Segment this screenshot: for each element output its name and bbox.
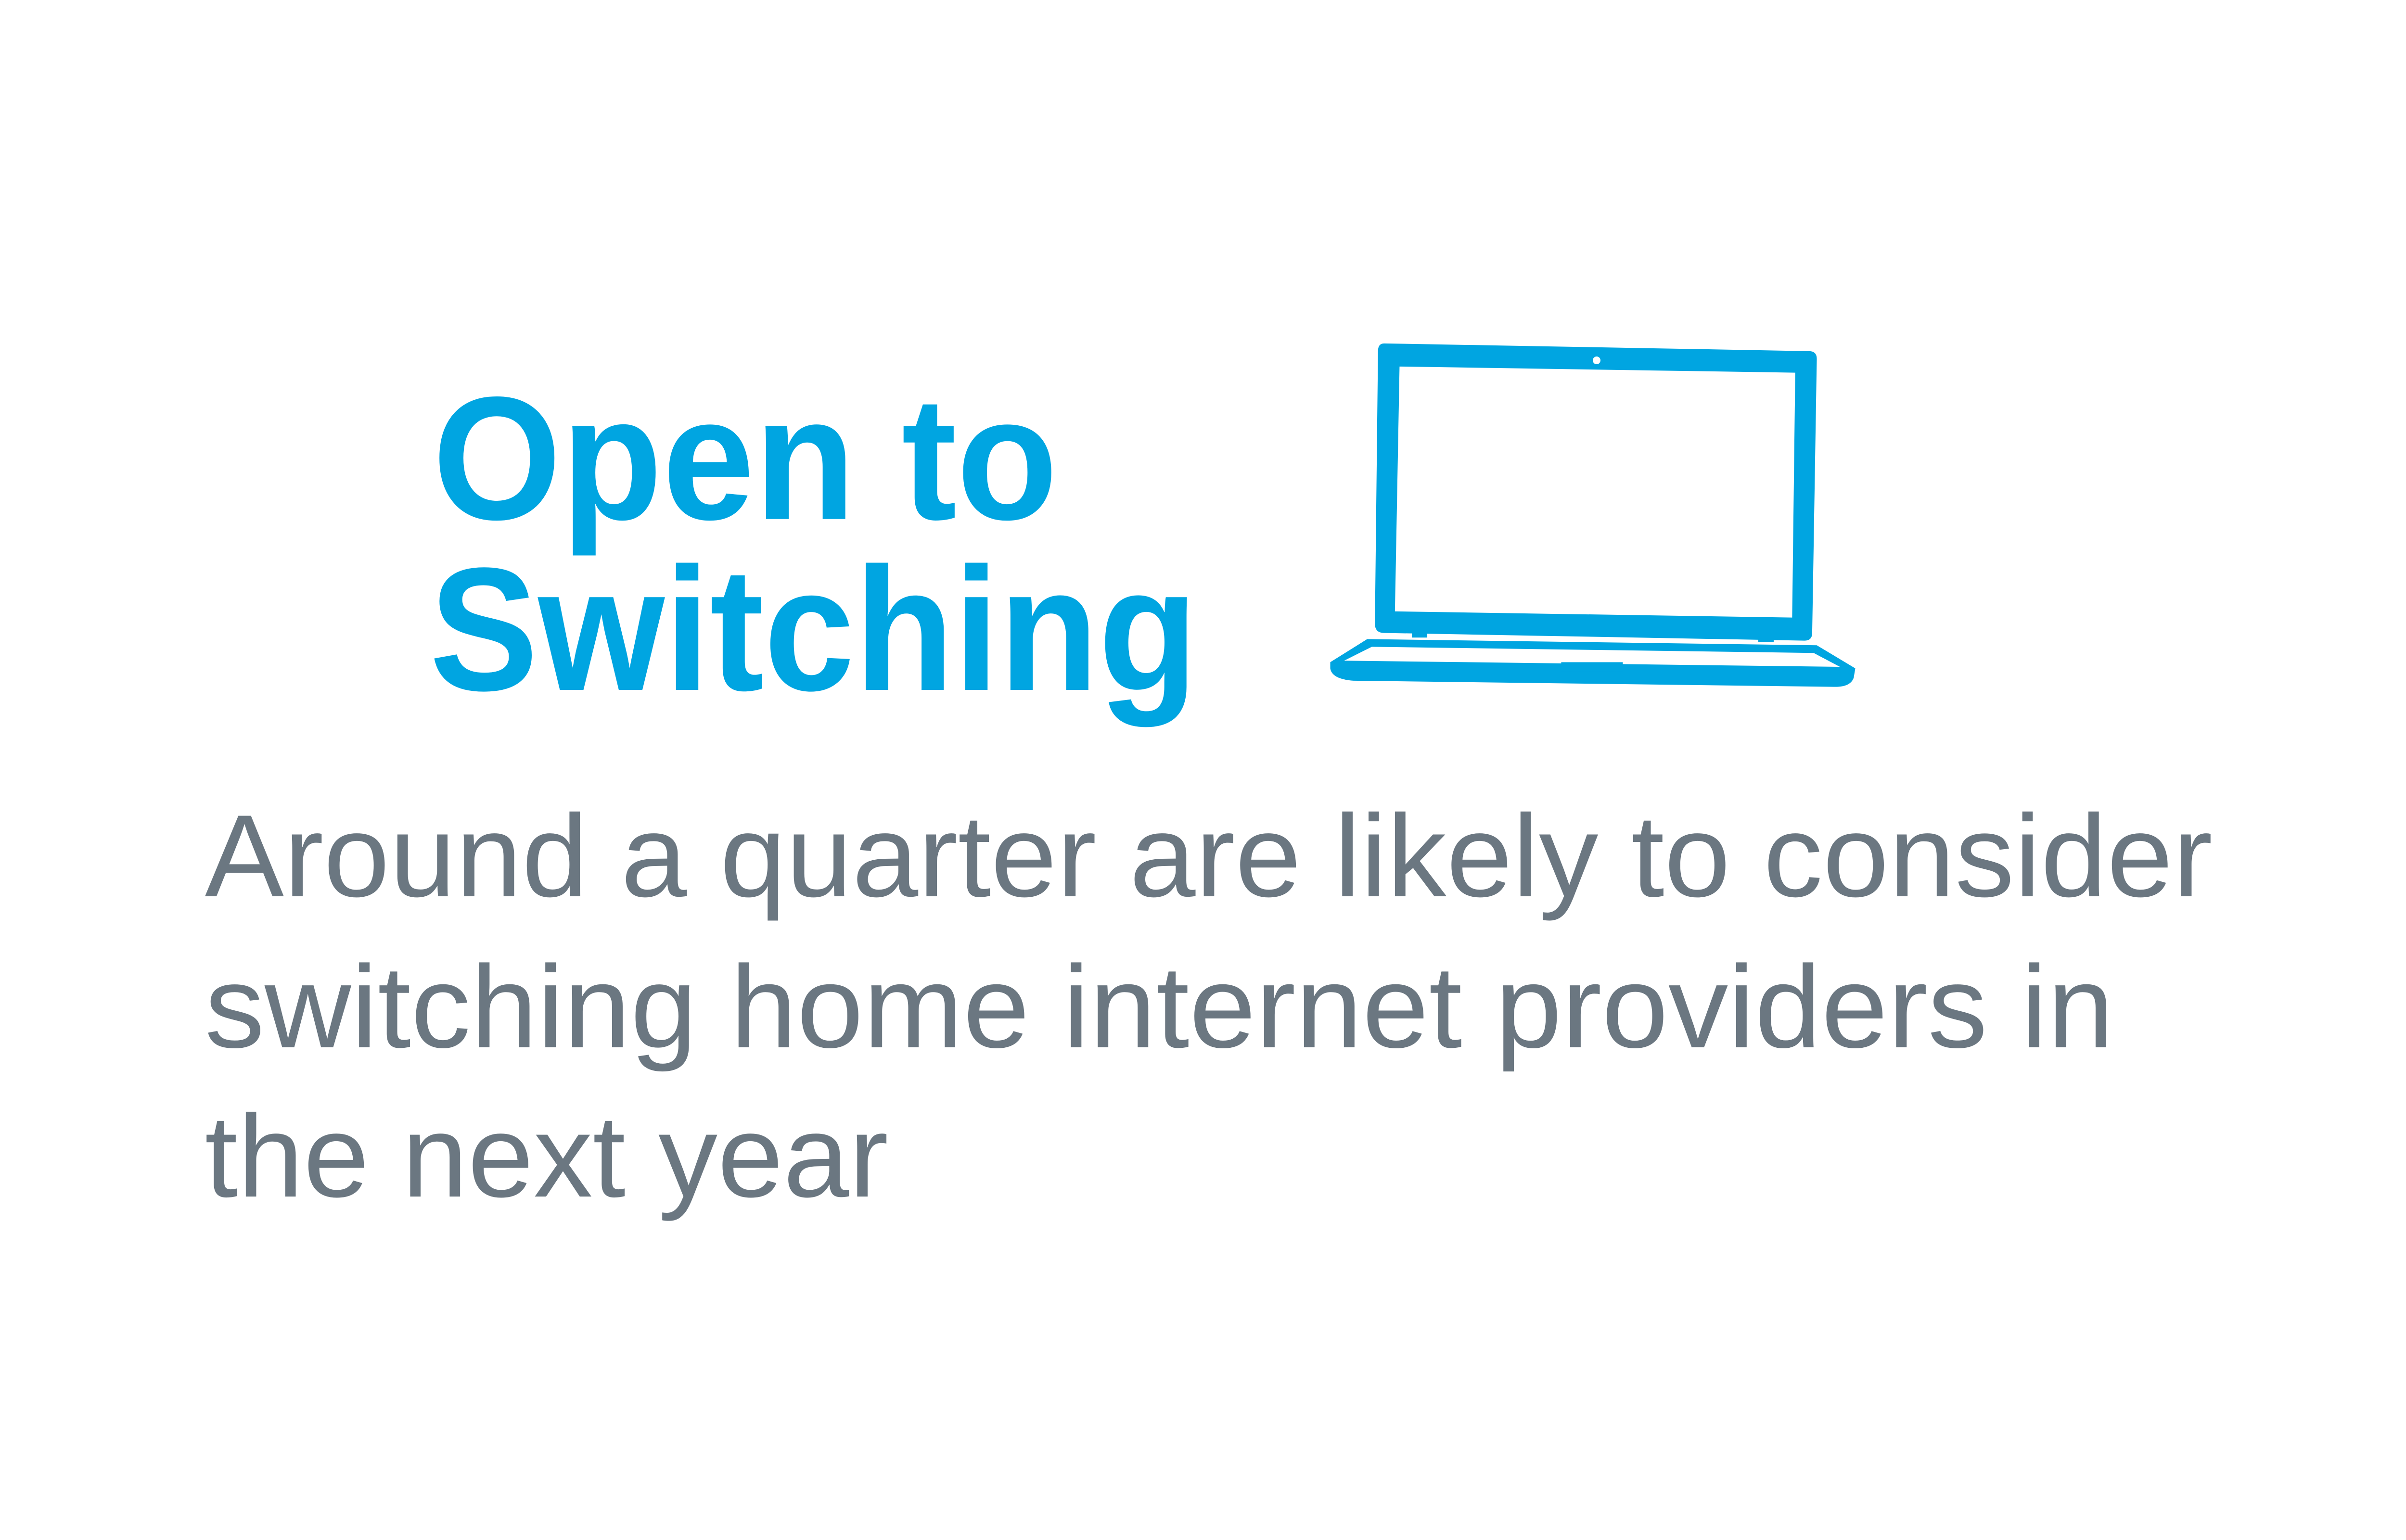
body text <box>205 790 2213 1222</box>
title: Switching <box>430 532 1198 728</box>
body text: Around a quarter are likely to consider <box>205 790 2213 921</box>
title: Open to <box>433 361 1058 558</box>
icon: laptop <box>1330 344 1856 687</box>
body text: the next year <box>205 1091 888 1222</box>
title <box>430 361 1198 728</box>
body text: switching home internet providers in <box>205 942 2114 1072</box>
